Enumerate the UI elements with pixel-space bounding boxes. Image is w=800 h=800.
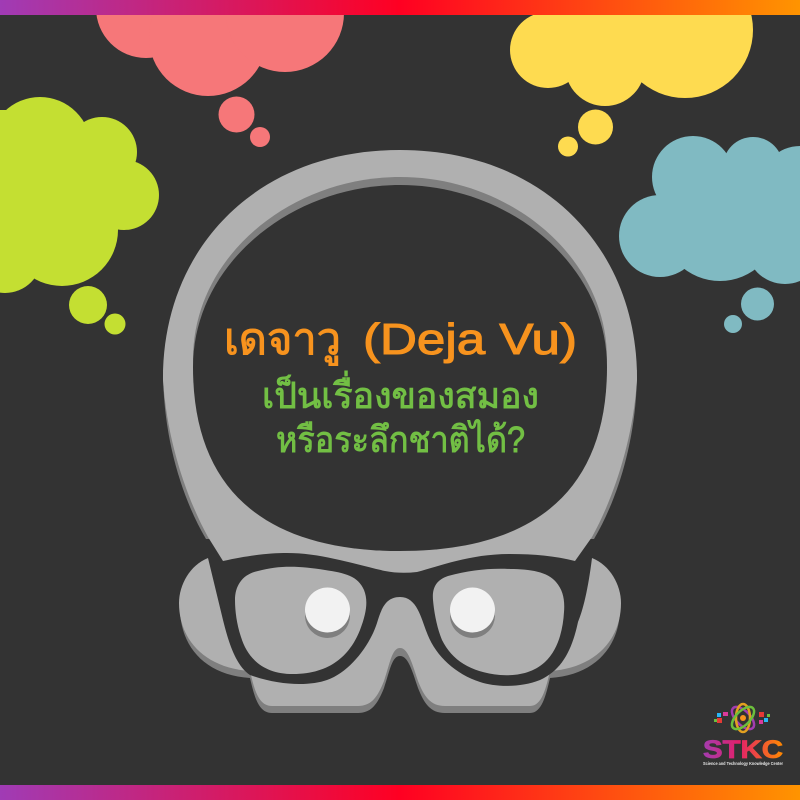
title [224, 315, 577, 366]
logo atom icon [714, 703, 770, 733]
cloud: pink thought bubble [96, 0, 344, 147]
inner circle [193, 185, 607, 551]
top gradient bar [0, 0, 800, 15]
ears [179, 558, 621, 678]
right lens [433, 569, 564, 675]
outer head shadow [163, 370, 637, 539]
title: (Deja Vu) [363, 315, 577, 364]
subtitle: หรือระลึกชาติได้? [276, 419, 525, 460]
left lens [235, 567, 366, 674]
inner ring shadow [193, 177, 607, 543]
head ring [163, 150, 637, 573]
subtitle: เป็นเรื่องของสมอง [262, 371, 539, 416]
title: เดจาวู [224, 315, 341, 366]
subtitle [262, 371, 539, 460]
bottom gradient bar [0, 785, 800, 800]
cloud: blue thought bubble [619, 136, 800, 333]
character: head with glasses [163, 150, 637, 713]
glasses frame [208, 530, 592, 686]
lower face and nose [225, 593, 575, 713]
logo wordmark: STKC [703, 736, 783, 764]
logo tagline: Science and Technology Knowledge Center [703, 761, 783, 766]
cloud: lime thought bubble [0, 97, 159, 334]
cloud: yellow thought bubble [510, 0, 753, 156]
right eye [450, 588, 495, 638]
left eye [305, 588, 350, 638]
logo: STKC [703, 703, 783, 766]
